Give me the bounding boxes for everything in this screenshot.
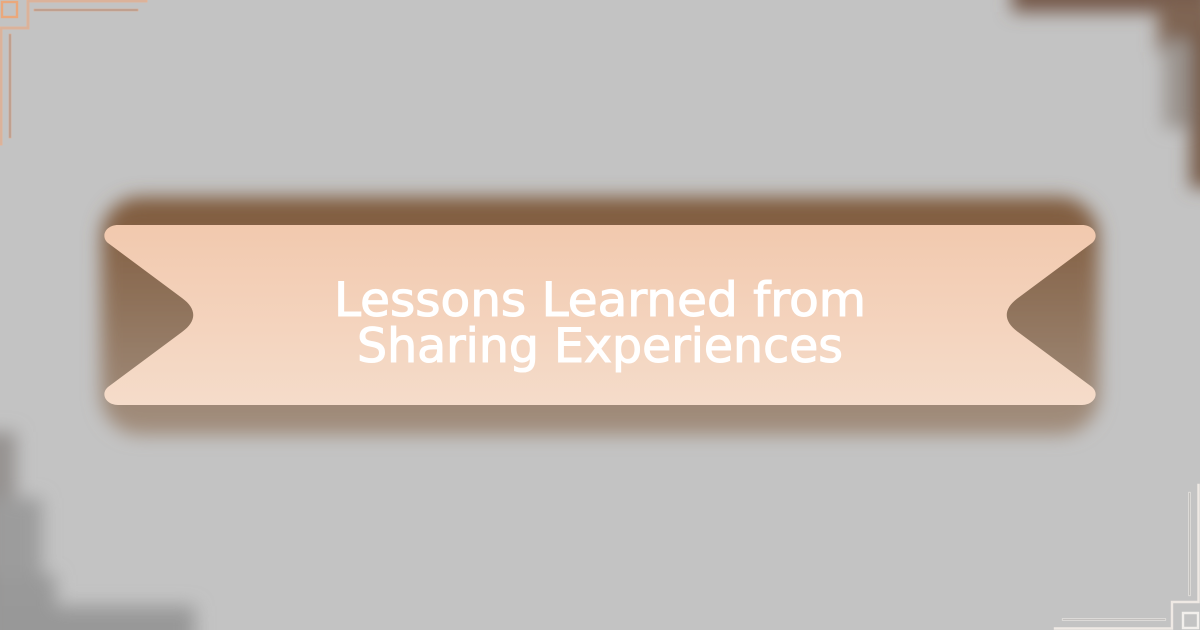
title: Sharing Experiences <box>357 319 843 374</box>
title: Lessons Learned from <box>334 273 866 328</box>
ribbon shadow <box>101 197 1099 435</box>
corner ornament: top left <box>1 1 146 144</box>
corner ornament: bottom right <box>1055 485 1198 628</box>
ribbon banner <box>104 225 1096 405</box>
blurred corner shadow: top right <box>1012 0 1200 188</box>
title <box>334 273 866 374</box>
blurred corner shadow: bottom left <box>0 432 195 630</box>
